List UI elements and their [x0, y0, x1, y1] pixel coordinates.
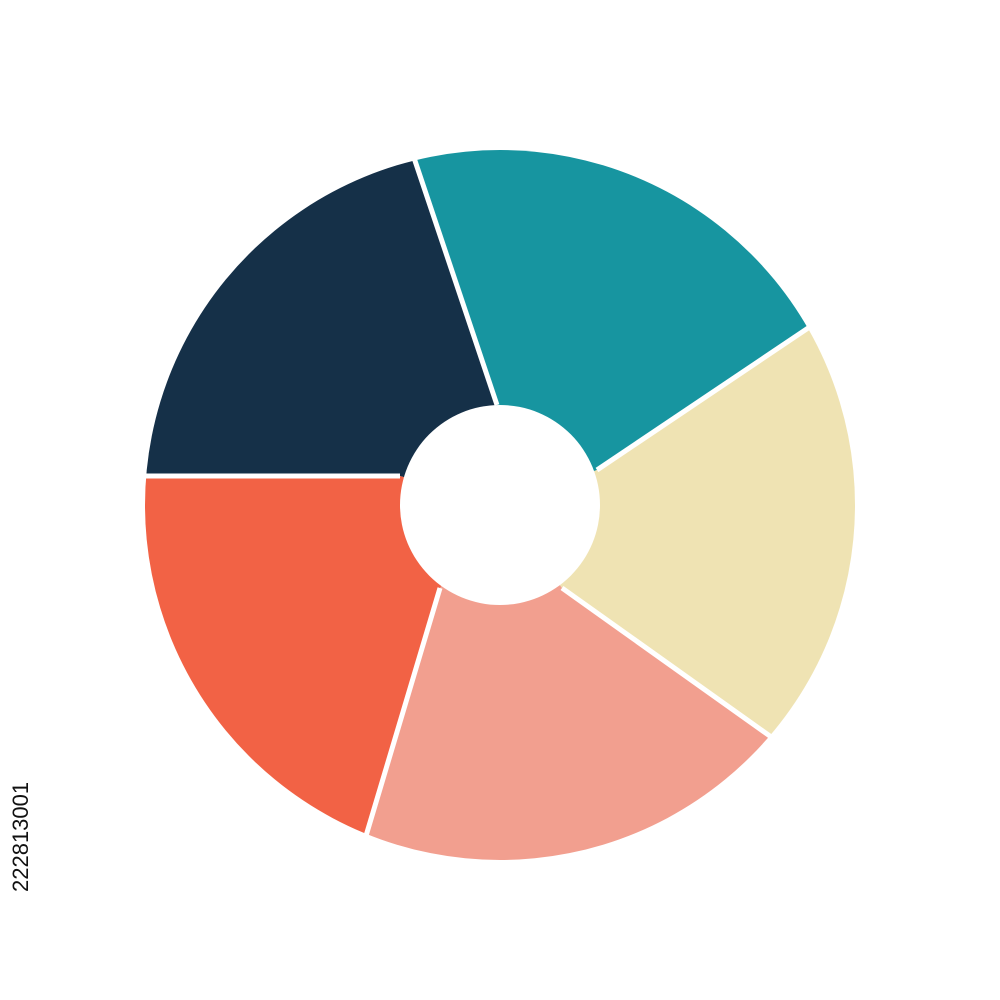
- donut chart: [145, 150, 855, 860]
- segment: cream: [500, 199, 1000, 900]
- segment: salmon: [368, 585, 768, 860]
- segment: teal: [417, 150, 806, 471]
- segment: orange: [145, 476, 442, 833]
- stock id text: 222813001: [8, 782, 33, 892]
- segment: navy: [146, 161, 497, 477]
